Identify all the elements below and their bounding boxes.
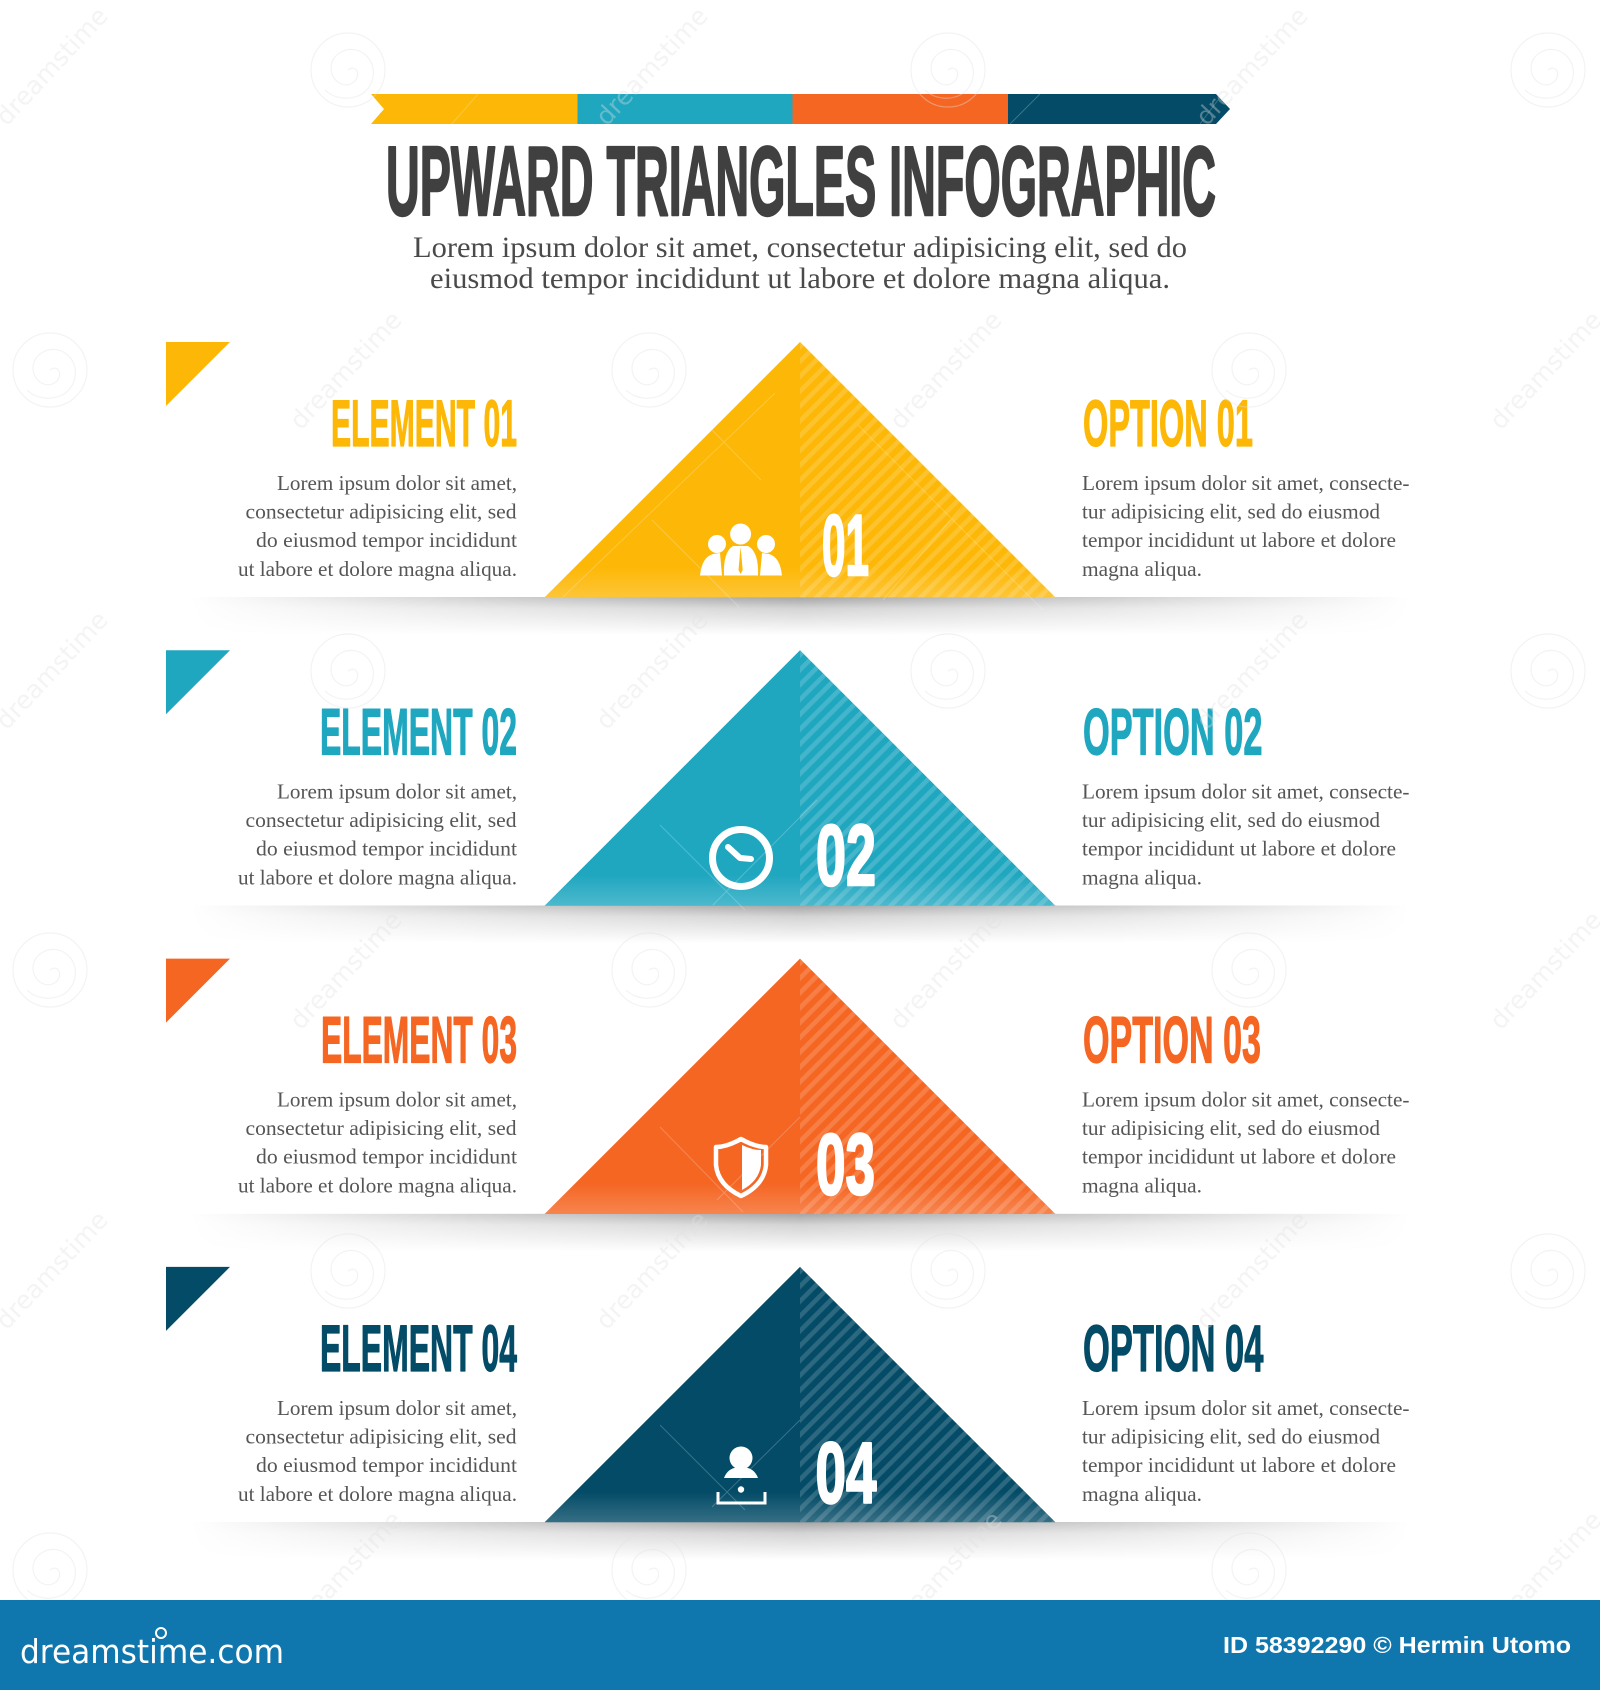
element text 4: Lorem ipsum dolor sit amet, — [277, 1396, 517, 1420]
option text 2 — [1082, 779, 1410, 889]
corner triangle 3 — [166, 959, 230, 1023]
element text 2: consectetur adipisicing elit, sed — [246, 808, 517, 832]
option text 2: tempor incididunt ut labore et dolore — [1082, 836, 1396, 860]
triangle 3 — [545, 959, 1055, 1214]
triangle 4 — [545, 1267, 1055, 1522]
triangle 2 — [545, 650, 1055, 906]
option text 1 — [1082, 471, 1410, 581]
row 2 — [166, 650, 1410, 943]
element text 1: do eiusmod tempor incididunt — [256, 528, 517, 552]
element text 1: consectetur adipisicing elit, sed — [246, 500, 517, 524]
element text 2: ut labore et dolore magna aliqua. — [238, 865, 517, 889]
element text 2 — [238, 779, 517, 889]
corner triangle 1 — [166, 342, 230, 406]
base shadow 1 — [244, 597, 1356, 630]
option text 4: magna aliqua. — [1082, 1482, 1202, 1506]
number 03: 03 — [816, 1117, 875, 1213]
element text 3 — [238, 1088, 517, 1198]
row 3: ELEMENT 03 — [321, 1003, 517, 1077]
option text 2: Lorem ipsum dolor sit amet, consecte- — [1082, 779, 1410, 803]
triangle 1 — [545, 342, 1055, 597]
icon: person at desk — [718, 1446, 765, 1503]
option text 4: tempor incididunt ut labore et dolore — [1082, 1453, 1396, 1477]
option text 2: magna aliqua. — [1082, 865, 1202, 889]
number 02: 02 — [816, 808, 876, 904]
base shadow 4 — [244, 1522, 1356, 1555]
option text 3: tempor incididunt ut labore et dolore — [1082, 1145, 1396, 1169]
icon: shield — [716, 1139, 766, 1196]
header ribbon — [371, 94, 1230, 124]
row 4: ELEMENT 04 — [320, 1311, 517, 1385]
row 3 — [166, 959, 1410, 1252]
option text 3: tur adipisicing elit, sed do eiusmod — [1082, 1116, 1380, 1140]
element text 1: ut labore et dolore magna aliqua. — [238, 557, 517, 581]
watermark overlay: dreamstime — [884, 905, 1008, 1035]
subtitle: eiusmod tempor incididunt ut labore et dolore magna aliqua. — [430, 263, 1170, 295]
watermark overlay: dreamstime — [590, 1, 714, 131]
corner triangle 4 — [166, 1267, 230, 1331]
option text 2: tur adipisicing elit, sed do eiusmod — [1082, 808, 1380, 832]
row 1: ELEMENT 01 — [331, 386, 517, 460]
icon: people — [700, 524, 782, 576]
option heading 4: OPTION 04 — [1083, 1311, 1264, 1385]
option text 4 — [1082, 1396, 1410, 1506]
element text 4 — [238, 1396, 517, 1506]
corner triangle 2 — [166, 650, 230, 714]
number 04: 04 — [816, 1425, 877, 1521]
option text 3: Lorem ipsum dolor sit amet, consecte- — [1082, 1088, 1410, 1112]
subtitle — [413, 232, 1187, 295]
option text 4: tur adipisicing elit, sed do eiusmod — [1082, 1424, 1380, 1448]
element text 2: Lorem ipsum dolor sit amet, — [277, 779, 517, 803]
element text 3: Lorem ipsum dolor sit amet, — [277, 1088, 517, 1112]
watermark overlay: dreamstime — [884, 305, 1008, 435]
option heading 3: OPTION 03 — [1083, 1003, 1261, 1077]
watermark overlay: dreamstime — [284, 1505, 408, 1635]
watermark overlay: dreamstime — [590, 605, 714, 735]
element text 3: do eiusmod tempor incididunt — [256, 1145, 517, 1169]
option text 3 — [1082, 1088, 1410, 1198]
element text 3: ut labore et dolore magna aliqua. — [238, 1174, 517, 1198]
row 4 — [166, 1267, 1410, 1560]
element text 1: Lorem ipsum dolor sit amet, — [277, 471, 517, 495]
element text 4: consectetur adipisicing elit, sed — [246, 1424, 517, 1448]
watermark overlay: dreamstime — [1190, 605, 1314, 735]
element text 1 — [238, 471, 517, 581]
row 1: 01 — [822, 498, 869, 594]
row 2: ELEMENT 02 — [320, 694, 517, 768]
element text 2: do eiusmod tempor incididunt — [256, 836, 517, 860]
element text 4: do eiusmod tempor incididunt — [256, 1453, 517, 1477]
option heading 2: OPTION 02 — [1083, 694, 1262, 768]
watermark overlay: dreamstime — [1190, 1, 1314, 131]
footer logo: dreamstime.com — [20, 1632, 284, 1671]
footer credit: ID 58392290 © Hermin Utomo — [1223, 1632, 1571, 1658]
option text 4: Lorem ipsum dolor sit amet, consecte- — [1082, 1396, 1410, 1420]
option text 3: magna aliqua. — [1082, 1174, 1202, 1198]
watermark overlay: dreamstime — [590, 1205, 714, 1335]
watermark overlay: dreamstime — [1190, 1205, 1314, 1335]
base shadow 2 — [244, 906, 1356, 938]
footer bar — [0, 1600, 1600, 1690]
element text 4: ut labore et dolore magna aliqua. — [238, 1482, 517, 1506]
watermark overlay: dreamstime — [284, 905, 408, 1035]
row 1: OPTION 01 — [1083, 386, 1253, 460]
watermark overlay: dreamstime — [884, 1505, 1008, 1635]
icon: clock — [712, 830, 770, 886]
option text 1: magna aliqua. — [1082, 557, 1202, 581]
row 1 — [166, 342, 1410, 635]
option text 1: Lorem ipsum dolor sit amet, consecte- — [1082, 471, 1410, 495]
subtitle: Lorem ipsum dolor sit amet, consectetur adipisicing elit, sed do — [413, 232, 1187, 264]
watermark overlay: dreamstime — [284, 305, 408, 435]
option text 1: tempor incididunt ut labore et dolore — [1082, 528, 1396, 552]
base shadow 3 — [245, 1214, 1356, 1246]
element text 3: consectetur adipisicing elit, sed — [246, 1116, 517, 1140]
option text 1: tur adipisicing elit, sed do eiusmod — [1082, 500, 1380, 524]
